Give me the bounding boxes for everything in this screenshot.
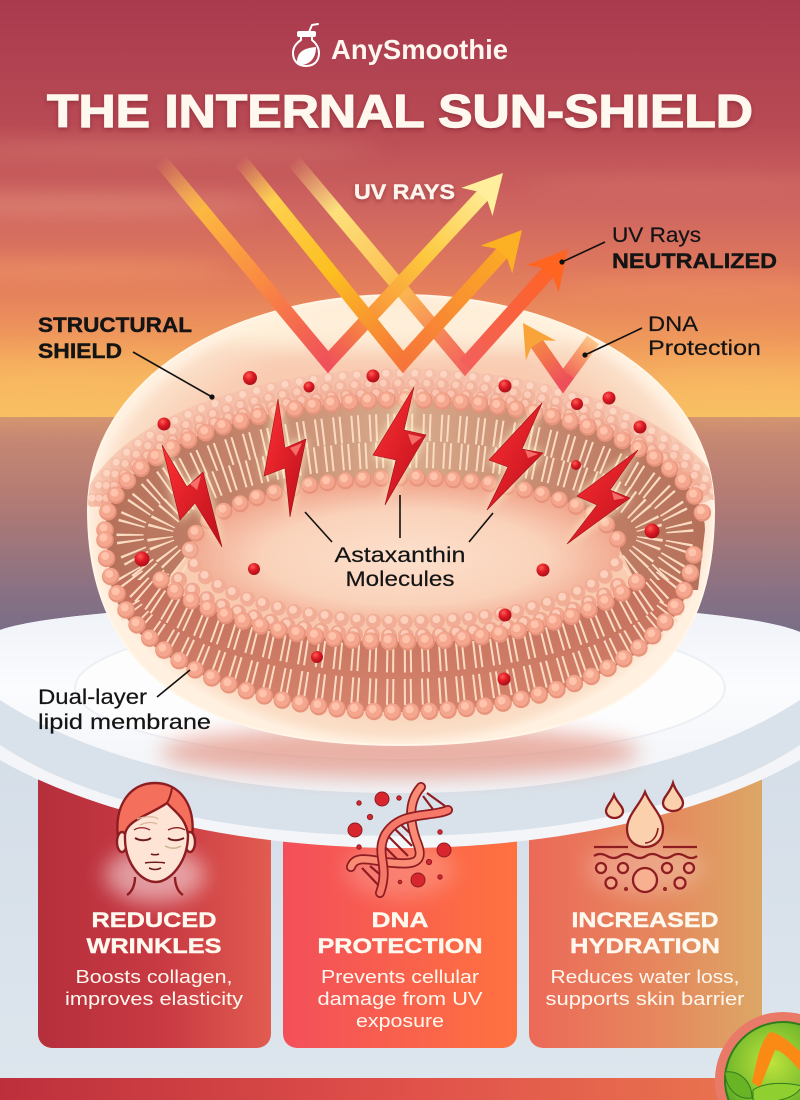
free radical red dots — [134, 370, 660, 686]
label: dual-layer lipid membrane: Dual-layer — [38, 686, 147, 709]
icon: water drops and skin — [587, 783, 703, 893]
label: UV rays neutralized: UV Rays — [612, 224, 701, 247]
card 2 text: DNA protection: exposure — [356, 1011, 444, 1031]
card 2 text: DNA protection: DNA — [372, 908, 428, 932]
title: THE INTERNAL SUN-SHIELD — [47, 85, 753, 137]
label: DNA protection: DNA — [648, 313, 698, 336]
card 1 text: reduced wrinkles — [65, 908, 243, 1009]
logo: AnySmoothie — [293, 24, 508, 66]
label: astaxanthin molecules: Molecules — [346, 568, 454, 591]
icon: face — [105, 783, 205, 903]
card 2 text: DNA protection: Prevents cellular — [321, 967, 479, 987]
label: structural shield: STRUCTURAL — [38, 314, 192, 337]
wordmark: AnySmoothie — [331, 34, 508, 65]
bolt highlights — [190, 434, 625, 500]
card 1 text: reduced wrinkles: WRINKLES — [86, 934, 222, 958]
card 2 text: DNA protection: PROTECTION — [318, 934, 482, 958]
card 1 text: reduced wrinkles: improves elasticity — [65, 989, 243, 1009]
leader lines — [133, 242, 642, 697]
lipid head rows — [104, 398, 705, 712]
label: DNA protection — [648, 313, 761, 360]
inner hole of the membrane ring — [190, 478, 620, 622]
card 3 text: increased hydration: INCREASED — [572, 908, 718, 932]
background: sunset sky — [0, 0, 800, 700]
back surface lipid heads — [92, 373, 717, 500]
label: UV rays: UV RAYS — [354, 180, 455, 204]
card 3 text: increased hydration: HYDRATION — [570, 934, 720, 958]
bottom band — [0, 1078, 800, 1100]
card 3 text: increased hydration: Reduces water loss, — [550, 967, 740, 987]
bubble body — [88, 295, 714, 745]
ray 3: neutralized — [293, 160, 584, 365]
icon: smoothie jar — [293, 24, 319, 66]
card 2 text: DNA protection: damage from UV — [318, 989, 482, 1009]
background: pale lower page — [0, 680, 800, 1078]
label: structural shield: SHIELD — [38, 340, 122, 363]
label: UV rays neutralized — [612, 224, 777, 273]
label: structural shield — [38, 314, 192, 363]
front membrane band with tails — [110, 573, 690, 712]
benefit card backgrounds — [38, 760, 762, 1048]
UV ray arrows — [160, 159, 593, 381]
card 3 text: increased hydration — [546, 908, 744, 1009]
label: dual-layer lipid membrane: lipid membrane — [38, 711, 211, 734]
white platform disc — [0, 602, 800, 848]
label: astaxanthin molecules — [334, 544, 466, 591]
lipid bubble cell — [88, 295, 717, 745]
card 2 text: DNA protection — [318, 908, 482, 1031]
label: astaxanthin molecules: Astaxanthin — [334, 544, 466, 567]
cream glow on top of the bubble — [235, 303, 566, 358]
card 1 text: reduced wrinkles: Boosts collagen, — [76, 967, 232, 987]
ray 2: reflected — [240, 160, 538, 362]
corner badge: green sphere logo — [715, 1012, 800, 1100]
ray 4: DNA protection arrow — [508, 313, 593, 381]
label: dual-layer lipid membrane — [38, 686, 211, 734]
label: DNA protection: Protection — [648, 337, 761, 360]
icon: DNA helix — [345, 787, 455, 898]
label: UV rays neutralized: NEUTRALIZED — [612, 250, 777, 273]
card 3 text: increased hydration: supports skin barrier — [546, 989, 744, 1009]
card 1 text: reduced wrinkles: REDUCED — [92, 908, 216, 932]
astaxanthin lightning bolts — [162, 387, 638, 547]
ray 1: reflected — [160, 159, 519, 362]
back membrane band with tails — [105, 400, 705, 590]
